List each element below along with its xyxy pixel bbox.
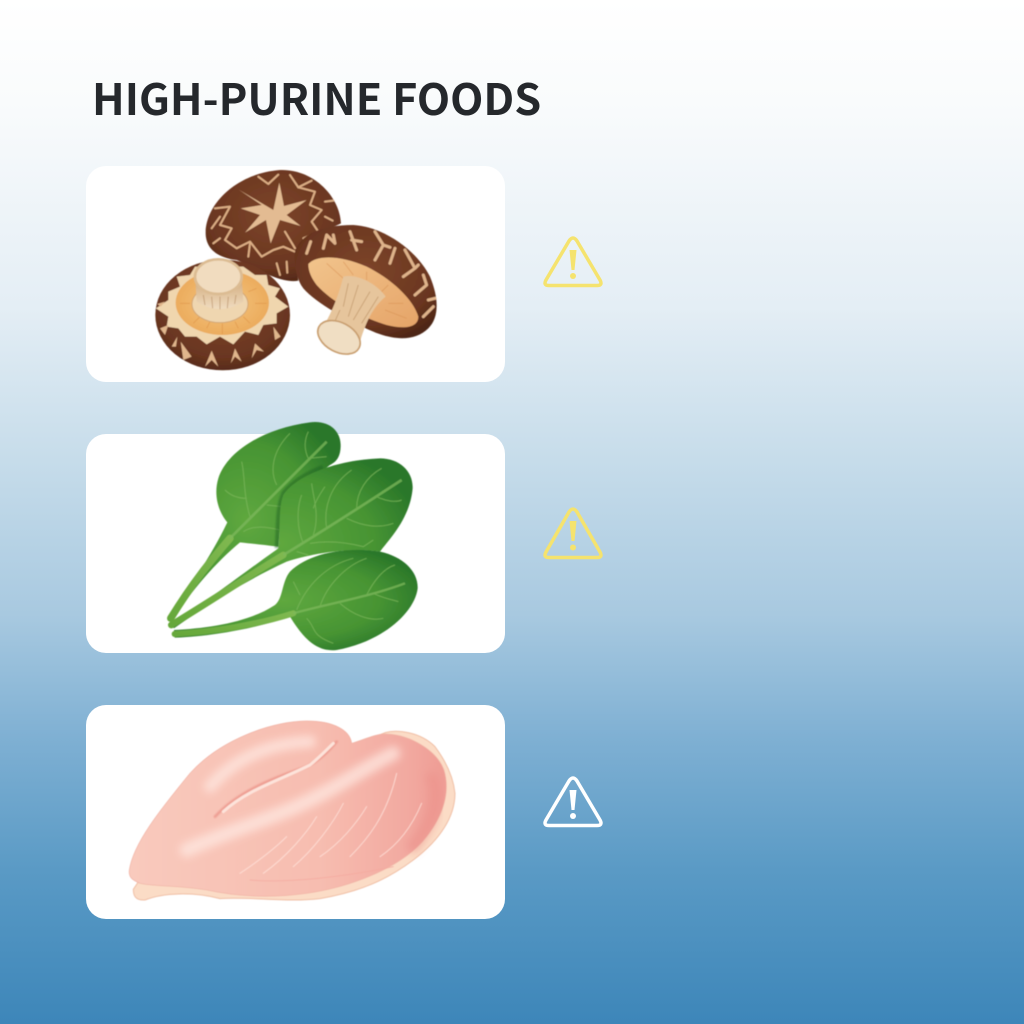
icon: chicken breast: [129, 721, 455, 900]
top leaf: [170, 422, 341, 619]
icon: mushrooms: [155, 170, 437, 370]
bottom leaf: [174, 550, 418, 650]
muscle fibres: [240, 773, 422, 881]
icon: spinach: [170, 422, 418, 650]
panel: chicken card: [86, 705, 505, 919]
crease: [215, 742, 337, 817]
icon: warning white: [545, 778, 601, 826]
middle leaf: [171, 458, 413, 628]
shaded right edge: [410, 773, 435, 850]
panel: mushrooms card: [86, 166, 505, 382]
highlights: [187, 742, 393, 850]
right mushroom side view: [295, 225, 437, 361]
shadow under middle leaf: [278, 468, 323, 548]
panel: spinach card: [86, 434, 505, 653]
meat body: [129, 721, 446, 896]
title: HIGH-PURINE FOODS: [92, 66, 541, 128]
icon: warning yellow 2: [545, 509, 601, 558]
icon: warning yellow 1: [545, 238, 601, 286]
back mushroom cap: [206, 170, 341, 281]
left mushroom underside: [155, 259, 290, 370]
fat underlay: [133, 731, 455, 900]
